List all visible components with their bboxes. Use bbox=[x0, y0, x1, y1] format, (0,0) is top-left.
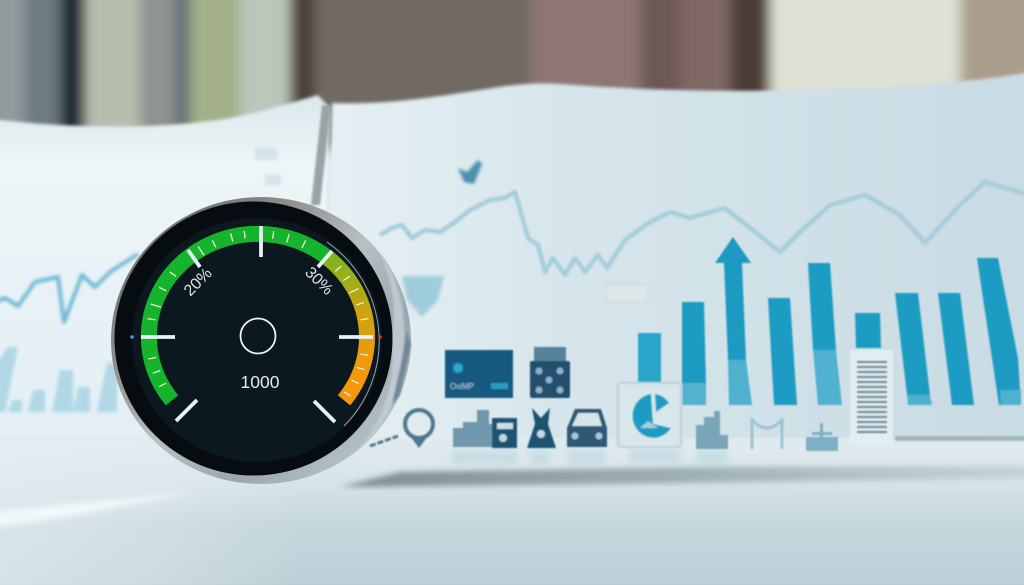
arrow: rising bar bbox=[715, 237, 752, 405]
icon: basket bbox=[806, 423, 838, 451]
icon: control box bbox=[530, 347, 570, 398]
bar chart: left sheet bbox=[0, 347, 117, 412]
bezel bbox=[114, 202, 392, 476]
gauge body bbox=[111, 197, 411, 484]
faint marks bbox=[255, 148, 281, 185]
panel: left chart sheet bbox=[0, 95, 330, 440]
indicator dots bbox=[130, 335, 134, 339]
major ticks bbox=[141, 226, 373, 422]
icon: small bird mark bbox=[458, 160, 482, 184]
icon: card panel bbox=[445, 350, 513, 398]
shadow band bbox=[340, 466, 1024, 487]
thin outer ring bbox=[327, 242, 379, 426]
line chart: right sheet bbox=[380, 182, 1024, 275]
arc: warning zone bbox=[328, 258, 367, 400]
light streak bbox=[0, 492, 195, 528]
icon: card panel: OxiMP bbox=[450, 382, 474, 391]
panel: right chart sheet bbox=[311, 68, 1024, 440]
icon: buildings and case bbox=[453, 410, 517, 448]
icon: pie chart card bbox=[618, 383, 681, 447]
sheet divider bbox=[311, 105, 331, 205]
icon reflections bbox=[452, 450, 727, 464]
icon: shield bbox=[402, 276, 444, 317]
icon: map pin bbox=[370, 410, 433, 448]
background: blurred room bbox=[0, 0, 1024, 150]
label: 30%: 30% bbox=[301, 264, 336, 299]
face bbox=[132, 218, 382, 462]
label box bbox=[606, 284, 648, 302]
arc: green zone bbox=[149, 234, 328, 400]
bar chart: main bbox=[638, 237, 1021, 405]
panel: striped tower card bbox=[850, 350, 893, 445]
line chart: left sheet bbox=[0, 254, 138, 322]
icons row bbox=[370, 347, 893, 451]
icon: car bbox=[567, 409, 607, 447]
icon: money bag bbox=[527, 408, 556, 448]
minor ticks bbox=[148, 231, 368, 396]
side highlight bbox=[352, 250, 404, 456]
label: 20%: 20% bbox=[181, 265, 216, 300]
center ring bbox=[240, 318, 276, 354]
tabletop bbox=[0, 436, 1024, 585]
value: 1000: 1000 bbox=[241, 372, 280, 392]
icon: bridge bbox=[752, 418, 782, 449]
icon: city block bbox=[696, 411, 728, 449]
gauge bbox=[111, 197, 411, 484]
